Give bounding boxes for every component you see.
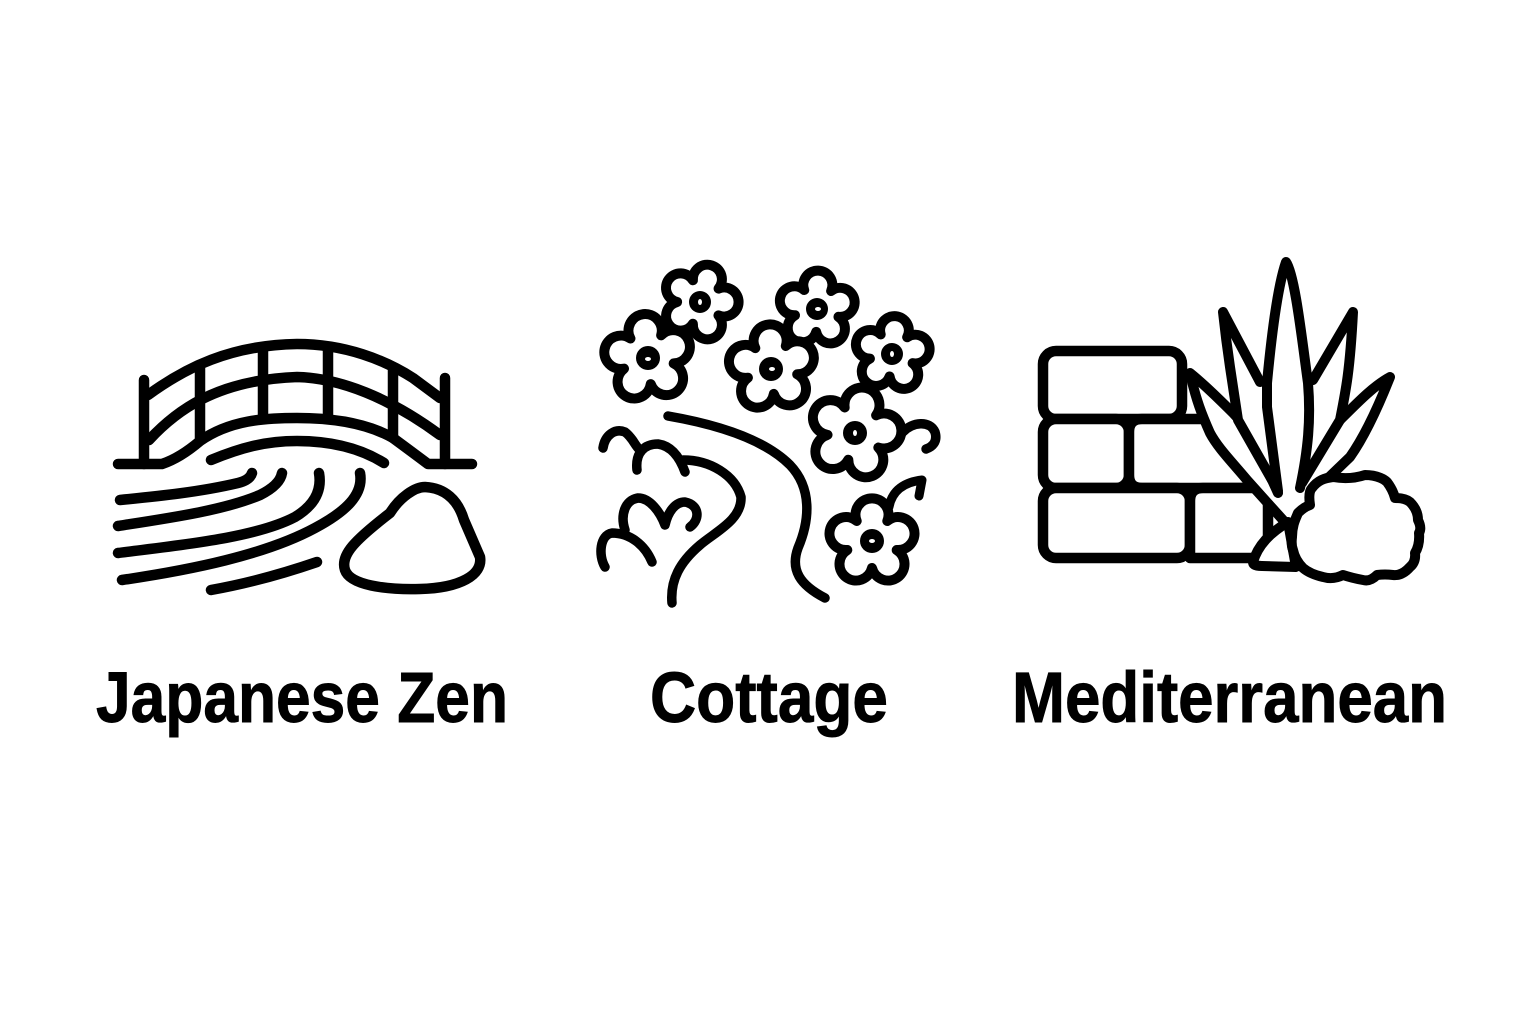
raked sand lines [118,441,384,590]
flower blossoms [601,254,933,581]
label: Cottage: Cottage [650,659,888,738]
icon: Japanese Zen garden [118,344,480,590]
agave plant leaves [1190,262,1390,567]
arched bridge [118,344,472,464]
round shrub [1292,475,1420,580]
winding path and vines [601,416,936,603]
rock [344,487,480,589]
label: Mediterranean: Mediterranean [1012,659,1447,738]
icon: Cottage garden flowers [601,254,936,603]
brick wall [1043,351,1268,558]
label: Japanese Zen: Japanese Zen [96,659,508,738]
icon: Mediterranean wall and plants [1043,262,1420,580]
